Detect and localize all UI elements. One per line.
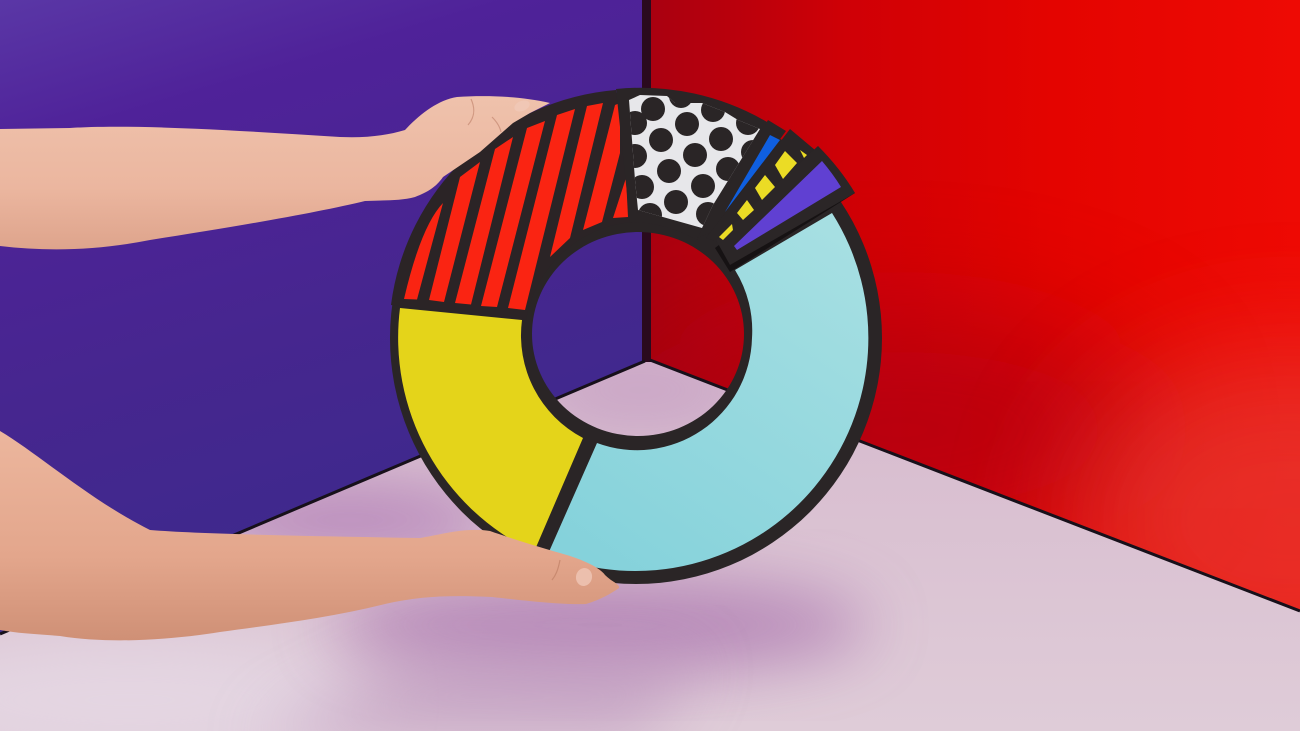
upper arm and hand [0, 96, 550, 249]
red wall [651, 0, 1300, 610]
blue panel [697, 120, 786, 238]
purple wedge [734, 161, 841, 250]
purple panel [716, 146, 855, 265]
purple wall [0, 0, 643, 634]
light lower right area of red wall [1070, 350, 1300, 690]
polka panel [616, 88, 767, 240]
light patch on floor [0, 645, 312, 731]
black dots [630, 97, 759, 226]
segment: blue sliver [697, 120, 786, 238]
dark lower area of red wall [860, 276, 1164, 531]
donut chart [390, 84, 882, 584]
floor [0, 350, 1300, 731]
floor shadow trailing to lower left [283, 660, 684, 731]
wedge shadow [715, 170, 855, 272]
thumb crease [552, 560, 560, 580]
yellow squares [719, 150, 807, 240]
floor shadow near purple wall [200, 488, 500, 552]
segment: purple wedge [715, 146, 855, 272]
segment: yellow squares panel [706, 129, 815, 245]
floor tint behind the hole [558, 362, 726, 436]
white field [629, 95, 760, 228]
lower arm and hand [0, 431, 619, 640]
red stripes [404, 103, 628, 310]
blue wedge [725, 135, 780, 212]
segment: cyan [548, 213, 868, 571]
segment: yellow [398, 308, 583, 552]
wall corner post [642, 0, 651, 362]
thumbnail [574, 566, 594, 588]
segment: polka dots [616, 84, 767, 240]
finger crease [468, 99, 501, 132]
donut body [390, 92, 882, 584]
stripe panel [391, 90, 632, 320]
wall skirting lines [0, 360, 1300, 634]
fingernail [513, 98, 531, 114]
segment: red striped [391, 90, 632, 320]
floor shadow under the donut [330, 577, 870, 673]
